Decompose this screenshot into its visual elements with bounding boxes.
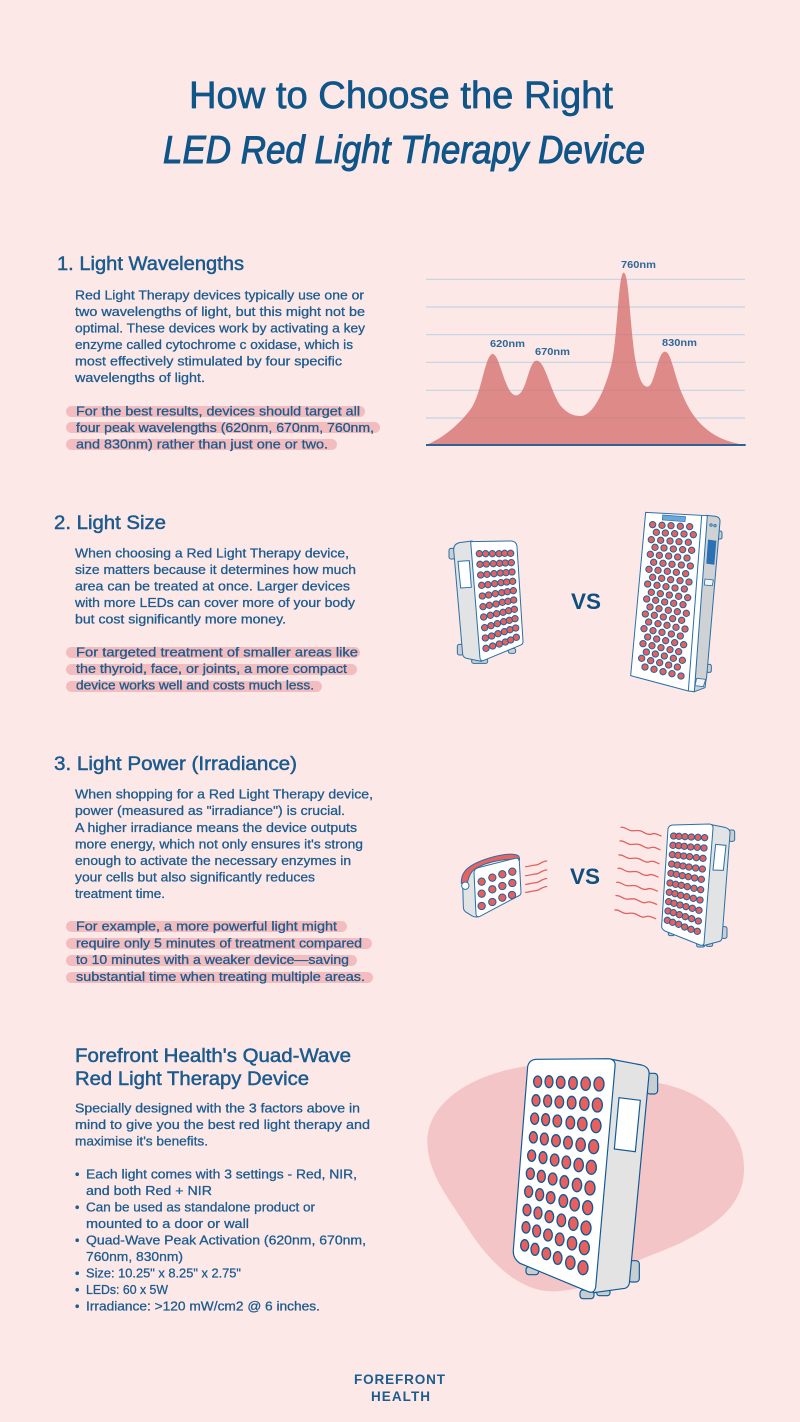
illustration: device on pink blob (427, 1059, 744, 1299)
text block: wavelengths explanation: optimal. These devices work by activating a key (75, 322, 366, 336)
text block: power explanation: enough to activate the necessary enzymes in (75, 854, 351, 868)
title: How to Choose the Right (189, 75, 613, 117)
list: device features: • (75, 1168, 79, 1182)
chart: wavelength peaks: 830nm (662, 338, 697, 349)
callout: wavelengths highlight (66, 404, 380, 452)
illustration: small device vs large device (449, 512, 722, 692)
panel: forefront health device (75, 1046, 370, 1314)
title: LED Red Light Therapy Device (163, 129, 645, 172)
icon: powerful device (662, 824, 735, 947)
callout: power highlight: to 10 minutes with a weaker device—saving (76, 953, 349, 967)
text block: wavelengths explanation: wavelengths of light. (74, 371, 205, 385)
callout: wavelengths highlight: and 830nm) rather than just one or two. (76, 438, 328, 452)
text block: power explanation: your cells but also significantly reduces (75, 870, 315, 884)
list: device features: • (75, 1300, 79, 1314)
text block: device intro: mind to give you the best red light therapy and (75, 1118, 370, 1132)
list: device features: • (75, 1200, 79, 1214)
icon: large device (631, 512, 722, 692)
text block: wavelengths explanation: most effectively stimulated by four specific (75, 354, 342, 368)
label: vs power: VS (570, 864, 600, 889)
text block: wavelengths explanation: two wavelengths of light, but this might not be (75, 305, 365, 319)
text block: power explanation (75, 788, 373, 901)
callout: size highlight: the thyroid, face, or joints, a more compact (76, 662, 348, 676)
heading: light size: 2. Light Size (54, 513, 166, 534)
list: device features: Quad-Wave Peak Activation (620nm, 670nm, (86, 1234, 366, 1248)
text block: power explanation: A higher irradiance means the device outputs (75, 821, 357, 835)
list: device features: • (75, 1266, 79, 1280)
text block: power explanation: When shopping for a Red Light Therapy device, (75, 788, 373, 802)
callout: power highlight (66, 920, 373, 984)
text block: wavelengths explanation (74, 288, 366, 385)
label: vs size: VS (571, 589, 601, 614)
list: device features: Can be used as standalone product or (86, 1200, 315, 1214)
callout: size highlight: device works well and costs much less. (76, 678, 314, 692)
text block: device intro: Specially designed with the 3 factors above in (75, 1102, 360, 1116)
icon: small device (449, 541, 523, 663)
text block: size explanation: but cost significantly more money. (75, 612, 286, 626)
list: device features: and both Red + NIR (86, 1184, 212, 1198)
icon: strong light waves (615, 827, 661, 919)
logo: forefront health: FOREFRONT (354, 1372, 446, 1387)
illustration: weak device vs powerful device (461, 824, 735, 947)
chart: wavelength peaks (426, 260, 746, 445)
text block: device intro (75, 1102, 370, 1148)
text block: size explanation: area can be treated at once. Larger devices (75, 580, 350, 594)
icon: featured device (513, 1059, 658, 1299)
logo: forefront health: HEALTH (371, 1389, 430, 1404)
callout: power highlight: require only 5 minutes of treatment compared (76, 936, 362, 950)
logo: forefront health (354, 1372, 446, 1404)
text block: size explanation: with more LEDs can cover more of your body (74, 596, 356, 610)
list: device features: • (75, 1283, 79, 1297)
text block: power explanation: power (measured as "irradiance") is crucial. (75, 804, 345, 818)
panel: light power (54, 754, 373, 984)
panel: light wavelengths (57, 254, 380, 452)
list: device features: • (75, 1234, 79, 1248)
chart: wavelength peaks: 620nm (490, 339, 525, 350)
heading: forefront device: Forefront Health's Quad-Wave (75, 1046, 351, 1067)
chart: wavelength peaks: 760nm (621, 260, 656, 271)
icon: portable device (461, 854, 521, 917)
list: device features: 760nm, 830nm) (86, 1250, 183, 1264)
list: device features: Irradiance: >120 mW/cm2 @ 6 inches. (86, 1300, 320, 1314)
text block: wavelengths explanation: Red Light Therapy devices typically use one or (75, 288, 364, 302)
callout: power highlight: substantial time when treating multiple areas. (76, 970, 365, 984)
heading: light wavelengths: 1. Light Wavelengths (57, 254, 244, 275)
chart: wavelength peaks: 670nm (535, 347, 570, 358)
heading: forefront device (75, 1046, 351, 1090)
text block: size explanation (74, 546, 356, 626)
callout: size highlight (66, 646, 360, 692)
list: device features: Size: 10.25" x 8.25" x 2.75" (86, 1266, 241, 1280)
list: device features: mounted to a door or wall (86, 1217, 249, 1231)
text block: wavelengths explanation: enzyme called cytochrome c oxidase, which is (75, 338, 353, 352)
blob background (427, 1065, 744, 1291)
panel: light size (54, 513, 360, 692)
list: device features (75, 1168, 366, 1314)
text block: power explanation: treatment time. (75, 887, 165, 901)
text block: device intro: maximise it's benefits. (75, 1134, 208, 1148)
text block: size explanation: When choosing a Red Light Therapy device, (75, 546, 349, 560)
callout: wavelengths highlight: For the best results, devices should target all (76, 404, 360, 418)
text block: power explanation: more energy, which not only ensures it's strong (75, 838, 363, 852)
heading: forefront device: Red Light Therapy Device (75, 1069, 309, 1090)
list: device features: LEDs: 60 x 5W (86, 1283, 168, 1297)
icon: weak light waves (526, 861, 547, 892)
callout: power highlight: For example, a more powerful light might (76, 920, 338, 934)
title (163, 75, 645, 172)
list: device features: Each light comes with 3 settings - Red, NIR, (86, 1168, 357, 1182)
heading: light power: 3. Light Power (Irradiance) (54, 754, 297, 775)
text block: size explanation: size matters because it determines how much (75, 563, 356, 577)
callout: wavelengths highlight: four peak wavelengths (620nm, 670nm, 760nm, (76, 421, 374, 435)
callout: size highlight: For targeted treatment of smaller areas like (76, 646, 358, 660)
